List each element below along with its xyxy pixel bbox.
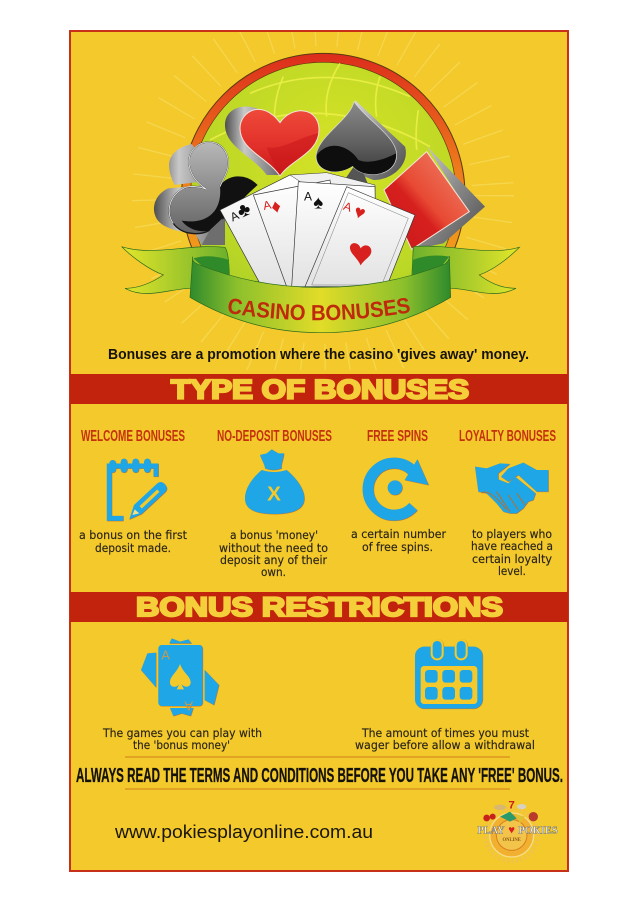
ribbon tail right — [412, 246, 519, 294]
description: deposit made. — [95, 541, 171, 555]
icon: handshake — [475, 463, 548, 513]
description: level. — [498, 564, 526, 578]
icon: calendar — [415, 640, 483, 709]
poster background — [70, 31, 568, 871]
ribbon title: CASINO BONUSES — [228, 298, 410, 320]
description: have reached a — [471, 539, 553, 553]
description: wager before allow a withdrawal — [355, 738, 535, 752]
card: ace of spades: A — [304, 190, 312, 204]
logo: play pokies online: ONLINE — [502, 838, 521, 843]
heading: LOYALTY BONUSES — [459, 428, 556, 445]
card: ace of clubs: A — [228, 208, 241, 224]
icon: money bag: X — [267, 482, 281, 505]
description: The games you can play with — [102, 726, 262, 740]
website url: www.pokiesplayonline.com.au — [114, 821, 373, 842]
description: a certain number — [351, 527, 446, 541]
card: ace of spades: ♠ — [313, 191, 323, 212]
heading: FREE SPINS — [367, 428, 428, 445]
intro sentence: Bonuses are a promotion where the casino 'gives away' money. — [108, 347, 529, 363]
heading: NO-DEPOSIT BONUSES — [217, 428, 332, 445]
description — [471, 527, 553, 578]
icon: money bag — [245, 449, 304, 514]
description — [351, 527, 446, 554]
description: the 'bonus money' — [133, 738, 230, 752]
logo: play pokies online — [477, 800, 558, 861]
heart suit — [225, 106, 319, 176]
logo: play pokies online: 7 — [509, 800, 515, 812]
logo: play pokies online: PLAY — [477, 824, 505, 836]
icon: fan of ace cards: A — [184, 698, 193, 712]
description: own. — [261, 565, 286, 579]
diamond suit — [384, 146, 485, 250]
logo: play pokies online: ♥ — [508, 825, 515, 837]
column: loyalty bonuses — [459, 428, 556, 578]
description: The amount of times you must — [361, 726, 529, 740]
sun rays — [153, 25, 493, 365]
description — [355, 726, 535, 752]
ribbon — [122, 246, 520, 333]
ribbon folds — [193, 256, 229, 278]
card: ace of spades — [292, 182, 377, 287]
icon: fan of ace cards — [141, 638, 219, 716]
card: ace of diamonds: ♦ — [269, 195, 283, 217]
badge artwork — [122, 52, 520, 333]
description: deposit any of their — [220, 553, 327, 567]
card: ace of diamonds: A — [262, 198, 272, 213]
icon: notepad and pencil — [109, 462, 167, 519]
icon: fan of ace cards: A — [161, 648, 170, 662]
card: ace of diamonds — [253, 180, 343, 287]
card: ace of clubs — [220, 173, 375, 287]
section band: bonus restrictions: BONUS RESTRICTIONS — [136, 592, 503, 622]
section band: bonus restrictions — [70, 592, 568, 622]
heading: WELCOME BONUSES — [81, 428, 185, 445]
description: a bonus 'money' — [230, 528, 318, 542]
spade suit — [316, 100, 406, 185]
description: a bonus on the first — [79, 528, 187, 542]
hero illustration: casino bonuses badge — [122, 32, 520, 370]
column: no-deposit bonuses — [217, 428, 332, 579]
description: certain loyalty — [472, 552, 552, 566]
description: without the need to — [219, 541, 328, 555]
globe ring — [181, 52, 466, 282]
ribbon tail left — [122, 247, 229, 294]
description — [102, 726, 262, 752]
section band: type of bonuses: TYPE OF BONUSES — [171, 374, 469, 404]
card: ace of hearts: A — [342, 199, 354, 215]
section band: type of bonuses — [70, 374, 568, 404]
card: ace of clubs: ♣ — [234, 198, 255, 223]
card: ace of hearts: ♥ — [351, 200, 368, 224]
playing cards fan — [220, 173, 415, 287]
club suit — [154, 142, 257, 245]
restriction: wagering — [355, 640, 535, 752]
description — [79, 528, 187, 555]
ribbon main band — [190, 256, 451, 333]
logo: play pokies online: POKIES — [518, 824, 558, 836]
description — [219, 528, 328, 579]
description: to players who — [472, 527, 552, 541]
column: free spins — [351, 428, 446, 554]
column: welcome bonuses — [79, 428, 187, 555]
restriction: games — [102, 638, 262, 752]
description: of free spins. — [362, 540, 433, 554]
icon: spin arrow — [368, 459, 429, 515]
card: ace of hearts — [305, 187, 415, 287]
